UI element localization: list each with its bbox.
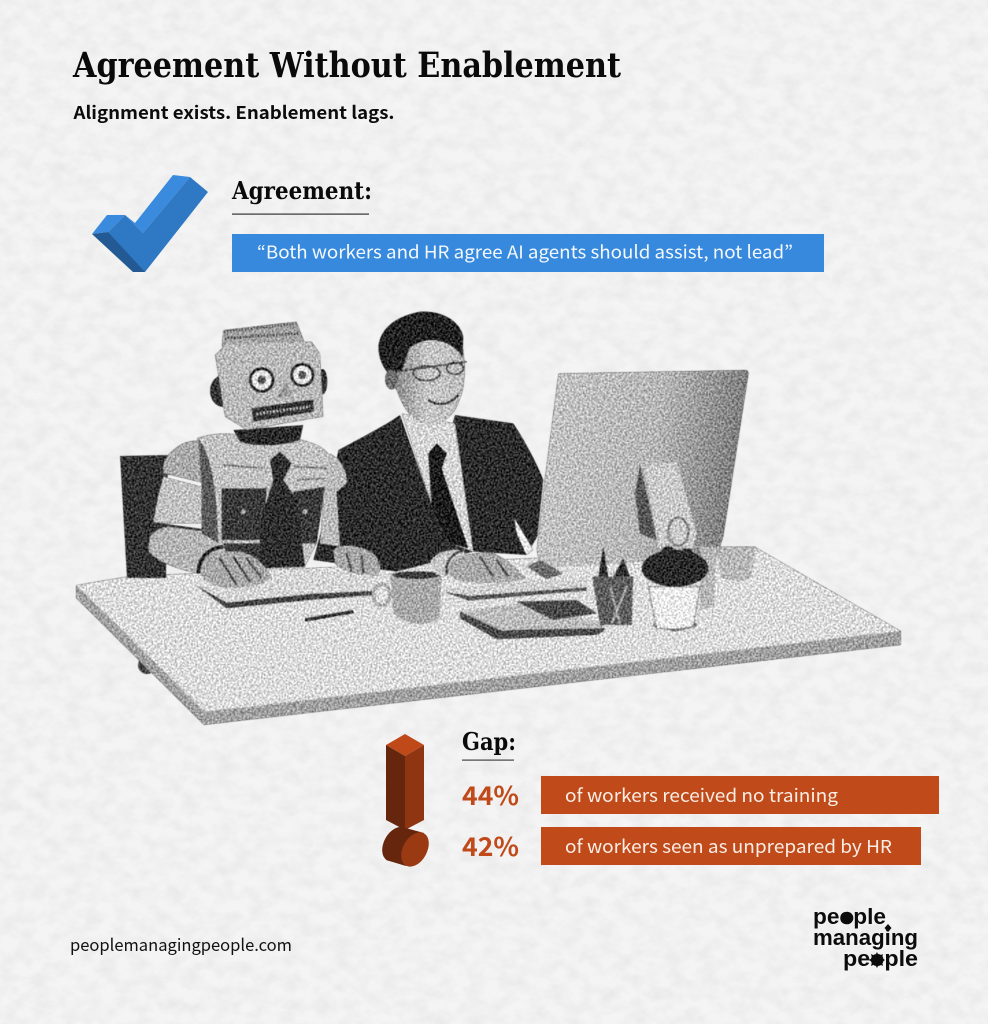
back cup bbox=[717, 547, 756, 581]
robot torso bbox=[197, 434, 330, 570]
monitor stand bbox=[635, 462, 697, 548]
chair bbox=[120, 455, 168, 578]
robot left hand bbox=[198, 547, 272, 588]
agreement quote bar bbox=[232, 234, 824, 272]
businessman and robot bbox=[148, 311, 543, 624]
side object bbox=[700, 547, 717, 609]
pencil cup bbox=[592, 547, 633, 625]
robot right arm bbox=[320, 453, 347, 547]
illustration: robot and businessman at a desk bbox=[76, 311, 901, 725]
logo bbox=[813, 904, 918, 971]
jacket bbox=[313, 415, 543, 572]
logo: managing bbox=[813, 925, 918, 950]
hand on monitor base bbox=[527, 560, 563, 579]
icon: red exclamation mark bbox=[377, 734, 434, 871]
robot head bbox=[215, 342, 323, 430]
footer url: peoplemanagingpeople.com bbox=[70, 932, 292, 956]
stat: 42 percent unprepared bbox=[462, 827, 921, 865]
robot neck bbox=[233, 425, 303, 445]
subtitle: Alignment exists. Enablement lags. bbox=[72, 100, 395, 125]
pen bbox=[305, 612, 353, 620]
glasses bbox=[397, 362, 467, 381]
robot right hand bbox=[333, 546, 380, 575]
coffee mug bbox=[373, 571, 442, 624]
desk bbox=[76, 548, 901, 725]
robot bbox=[148, 322, 347, 573]
smile bbox=[428, 395, 458, 404]
robot crown bbox=[222, 322, 305, 347]
right side of desk scene bbox=[537, 370, 756, 609]
logo: people bbox=[843, 946, 918, 971]
robot mouth bbox=[252, 399, 313, 422]
man sleeve bbox=[430, 550, 467, 577]
suit gap highlight bbox=[514, 518, 533, 555]
stat: 42 percent unprepared: of workers seen as unprepared by HR bbox=[565, 833, 892, 859]
title: Agreement Without Enablement bbox=[72, 45, 621, 86]
monitor bbox=[537, 370, 749, 568]
necktie bbox=[428, 443, 468, 548]
icon: blue check mark bbox=[92, 175, 208, 272]
businessman bbox=[313, 311, 543, 572]
logo: people bbox=[813, 904, 886, 929]
man hand bbox=[446, 550, 527, 583]
robot tie bbox=[260, 452, 305, 568]
robot eyes bbox=[249, 363, 314, 393]
stat: 44 percent no training: 44% bbox=[462, 776, 519, 813]
agreement heading: Agreement: bbox=[231, 176, 372, 205]
agreement quote bar: “Both workers and HR agree AI agents should assist, not lead” bbox=[257, 238, 793, 264]
hair bbox=[378, 311, 463, 373]
stacked books bbox=[460, 600, 605, 639]
plant pot bbox=[642, 546, 708, 632]
open notebook bbox=[195, 570, 373, 608]
robot left arm bbox=[148, 441, 217, 573]
stat: 42 percent unprepared: 42% bbox=[462, 827, 519, 864]
keyboard bbox=[443, 580, 587, 601]
gap heading: Gap: bbox=[462, 727, 516, 756]
stat: 44 percent no training bbox=[462, 776, 939, 814]
desk leg bbox=[138, 656, 156, 674]
stat: 44 percent no training: of workers received no training bbox=[565, 782, 838, 808]
face bbox=[390, 340, 465, 425]
robot nose bbox=[277, 382, 293, 398]
robot ears bbox=[210, 369, 327, 407]
shirt bbox=[402, 413, 473, 552]
desk items right bbox=[430, 518, 708, 639]
ear bbox=[385, 369, 398, 389]
